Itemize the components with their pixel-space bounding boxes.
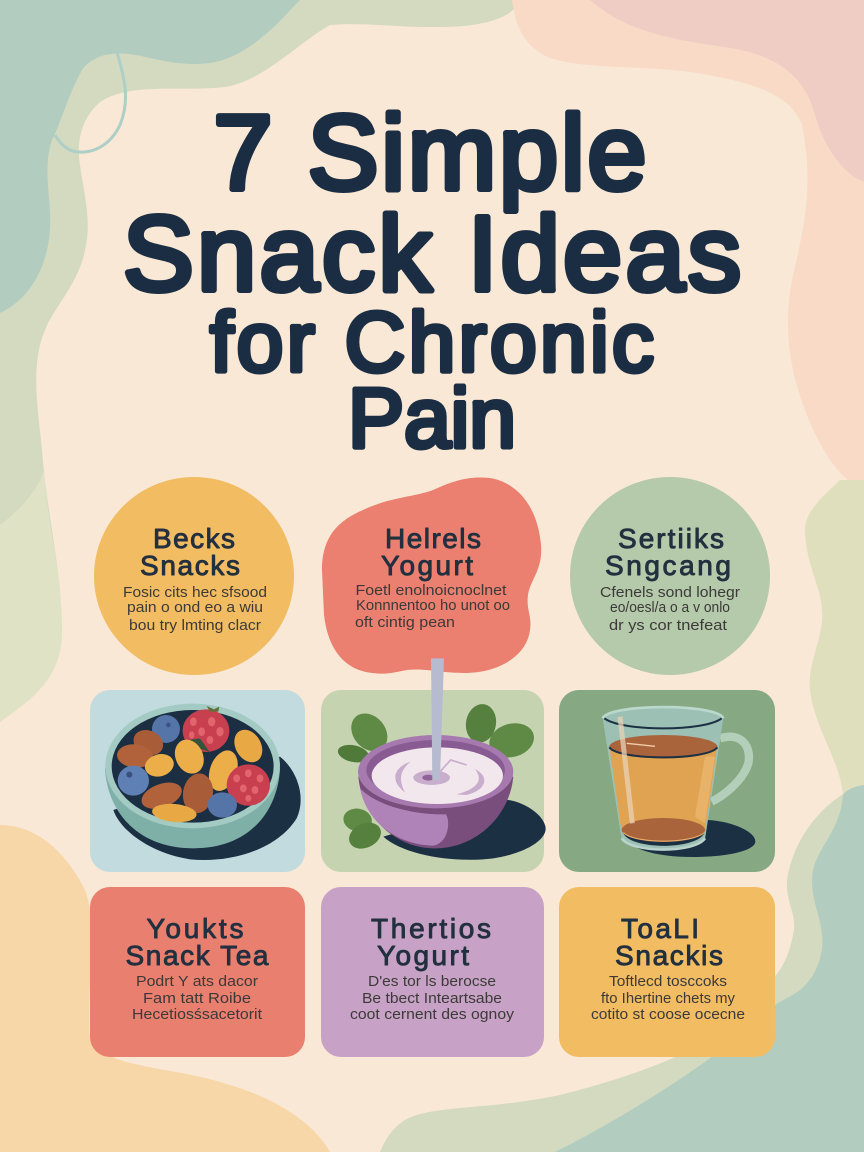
- panel: Sertiiks Sngcang circle: dr ys cor tnefeat: [609, 618, 727, 634]
- panel: Sertiiks Sngcang circle: [570, 477, 770, 675]
- panel: Becks Snacks circle: Fosic cits hec sfsood: [123, 585, 267, 601]
- panel: Becks Snacks circle: bou try lmting clacr: [129, 618, 261, 634]
- icon: purple bowl: [358, 735, 513, 848]
- title: 7 Simple: [214, 94, 646, 212]
- panel: Helrels Yogurt blob: Foetl enolnoicnoclnet: [356, 583, 506, 599]
- panel: Youkts Snack Tea card: Youkts: [146, 913, 244, 944]
- panel: nuts and berries bowl: [90, 690, 305, 872]
- panel: Becks Snacks circle: pain o ond eo a wiu: [127, 600, 263, 616]
- panel: ToaLl Snackis card: Toftlecd tosccoks: [609, 974, 727, 990]
- icon: bowl: [105, 704, 280, 848]
- panel: Thertios Yogurt card: Be tbect Inteartsabe: [362, 991, 502, 1007]
- panel: ToaLl Snackis card: ToaLI: [621, 913, 699, 944]
- title: for Chronic: [210, 295, 654, 389]
- panel: Sertiiks Sngcang circle: Sertiiks: [618, 523, 724, 554]
- panel: Youkts Snack Tea card: [90, 887, 305, 1057]
- panel: ToaLl Snackis card: fto Ihertine chets my: [601, 991, 736, 1007]
- panel: ToaLl Snackis card: [559, 887, 775, 1057]
- panel: ToaLl Snackis card: cotito st coose ocecne: [591, 1007, 745, 1023]
- panel: Sertiiks Sngcang circle: Cfenels sond lohegr: [600, 585, 740, 601]
- panel: Thertios Yogurt card: D'es tor ls berocse: [368, 974, 496, 990]
- panel: Youkts Snack Tea card: Hecetiosśsacetorit: [132, 1007, 262, 1023]
- panel: Becks Snacks circle: Snacks: [140, 550, 240, 581]
- icon: bowl shadow: [113, 757, 301, 860]
- panel: Helrels Yogurt blob: Helrels: [385, 523, 481, 554]
- title: [123, 94, 741, 465]
- panel: Becks Snacks circle: [94, 477, 294, 675]
- panel: Thertios Yogurt card: Yogurt: [377, 940, 469, 971]
- panel: ToaLl Snackis card: Snackis: [615, 940, 723, 971]
- panel: yogurt bowl: [321, 658, 546, 872]
- panel: Sertiiks Sngcang circle: Sngcang: [605, 550, 731, 581]
- panel: Helrels Yogurt blob: Yogurt: [381, 550, 473, 581]
- panel: Becks Snacks circle: Becks: [153, 523, 235, 554]
- title: Pain: [348, 371, 516, 465]
- icon: glass shadow: [625, 820, 755, 857]
- panel: Youkts Snack Tea card: Snack Tea: [126, 940, 269, 971]
- icon: nuts and berries: [116, 706, 270, 824]
- icon: bowl shadow: [383, 800, 546, 860]
- panel: Sertiiks Sngcang circle: eo/oesl/a o a v onlo: [610, 600, 730, 616]
- icon: spoon: [431, 658, 444, 780]
- panel: Helrels Yogurt blob: [322, 478, 541, 674]
- panel: Helrels Yogurt blob: Konnnentoo ho unot oo: [356, 598, 510, 614]
- panel: Thertios Yogurt card: Thertios: [371, 913, 491, 944]
- title: Snack Ideas: [123, 195, 741, 313]
- panel: Youkts Snack Tea card: Podrt Y ats dacor: [136, 974, 258, 990]
- icon: mug handle: [712, 737, 749, 802]
- panel: Youkts Snack Tea card: Fam tatt Roibe: [143, 991, 251, 1007]
- panel: tea glass: [559, 690, 775, 872]
- panel: Thertios Yogurt card: coot cernent des ognoy: [350, 1007, 515, 1023]
- panel: Thertios Yogurt card: [321, 887, 544, 1057]
- panel: Helrels Yogurt blob: oft cintig pean: [355, 615, 455, 631]
- icon: basil leaves: [336, 702, 538, 854]
- icon: glass with tea: [603, 707, 723, 850]
